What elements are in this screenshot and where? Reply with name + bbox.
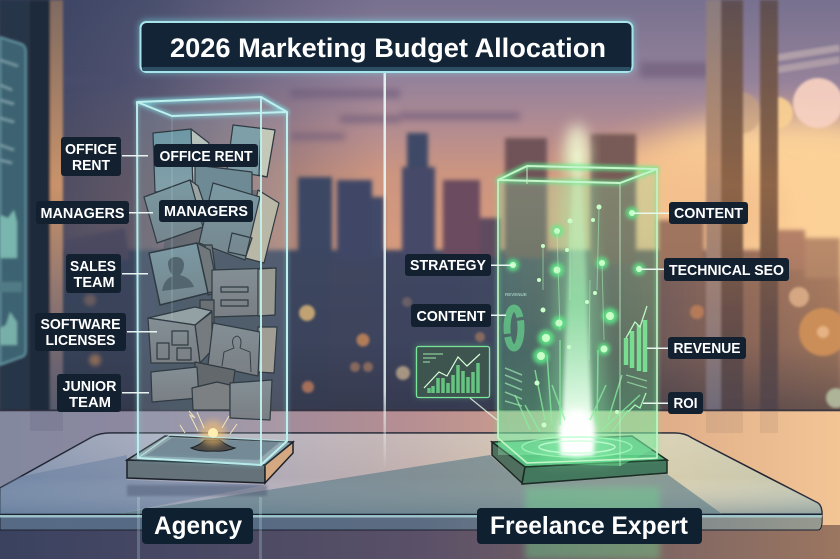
agency label: sales team — [66, 254, 148, 293]
freelance label: strategy: STRATEGY — [410, 257, 486, 274]
agency label: software licenses — [35, 313, 157, 351]
agency label: software licenses: SOFTWARE — [40, 316, 120, 333]
cube: junior B — [192, 382, 230, 410]
agency label: managers outer: MANAGERS — [40, 205, 124, 222]
wall screen — [0, 37, 26, 365]
agency label: junior team: TEAM — [69, 394, 111, 411]
cube: office rent A — [153, 129, 209, 192]
panel: agency glass tank — [127, 97, 293, 483]
freelance label: roi: ROI — [674, 395, 698, 412]
freelance label: content top: CONTENT — [674, 205, 743, 222]
agency label: junior team — [57, 374, 149, 412]
agency label: sales team: SALES — [70, 258, 116, 275]
side panel: revenue bars — [626, 306, 647, 412]
freelance label: roi — [643, 392, 703, 414]
agency label: office rent inner: OFFICE RENT — [160, 148, 252, 165]
freelance label: content left — [411, 304, 506, 327]
agency label: managers outer — [36, 201, 153, 224]
cube: manager portrait — [208, 323, 277, 376]
window frames — [0, 0, 778, 412]
agency label: junior team: JUNIOR — [62, 378, 117, 395]
divider line — [384, 72, 386, 470]
heading: freelance expert: Freelance Expert — [490, 512, 689, 540]
side panel: donut chart — [505, 292, 527, 406]
cube: software licenses — [148, 307, 212, 363]
freelance label: revenue: REVENUE — [674, 340, 740, 357]
panel: freelance glass tank — [492, 124, 667, 484]
title banner — [139, 20, 634, 73]
agency label: managers inner: MANAGERS — [164, 203, 248, 220]
freelance label: technical seo — [639, 258, 789, 281]
freelance label: content left: CONTENT — [416, 308, 486, 325]
bokeh — [4, 78, 840, 408]
heading: agency — [142, 508, 253, 544]
heading: agency: Agency — [154, 512, 242, 540]
heading: freelance expert — [477, 508, 702, 544]
freelance label: revenue — [647, 337, 746, 359]
title banner: 2026 Marketing Budget Allocation — [170, 33, 606, 63]
agency label: office rent outer — [61, 137, 148, 176]
stacked cubes — [144, 125, 279, 420]
floating mini chart — [416, 346, 497, 420]
cube: junior A — [151, 367, 199, 402]
cube: sales team — [149, 243, 218, 305]
agency label: office rent inner — [154, 144, 258, 167]
cube: managers B — [199, 183, 279, 263]
agency label: software licenses: LICENSES — [46, 332, 116, 349]
tank base — [492, 436, 667, 484]
glass edges — [137, 97, 287, 465]
freelance label: strategy — [405, 254, 513, 276]
tank base — [127, 436, 293, 483]
cube: managers A — [144, 180, 212, 243]
glass edges — [498, 166, 657, 466]
agency label: sales team: TEAM — [74, 274, 114, 291]
freelance label: content top — [633, 202, 748, 224]
freelance label: technical seo: TECHNICAL SEO — [669, 262, 784, 279]
cube: documents — [212, 268, 276, 317]
spark: failing light at base — [180, 411, 237, 451]
table — [0, 433, 822, 559]
agency label: office rent outer: OFFICE — [65, 141, 117, 158]
agency label: office rent outer: RENT — [72, 157, 110, 174]
side panel: donut chart: REVENUE — [505, 292, 527, 297]
cube: office rent B — [227, 125, 275, 177]
cube: junior C — [230, 380, 272, 420]
green energy beam — [515, 124, 640, 462]
glowing particles — [507, 204, 645, 428]
